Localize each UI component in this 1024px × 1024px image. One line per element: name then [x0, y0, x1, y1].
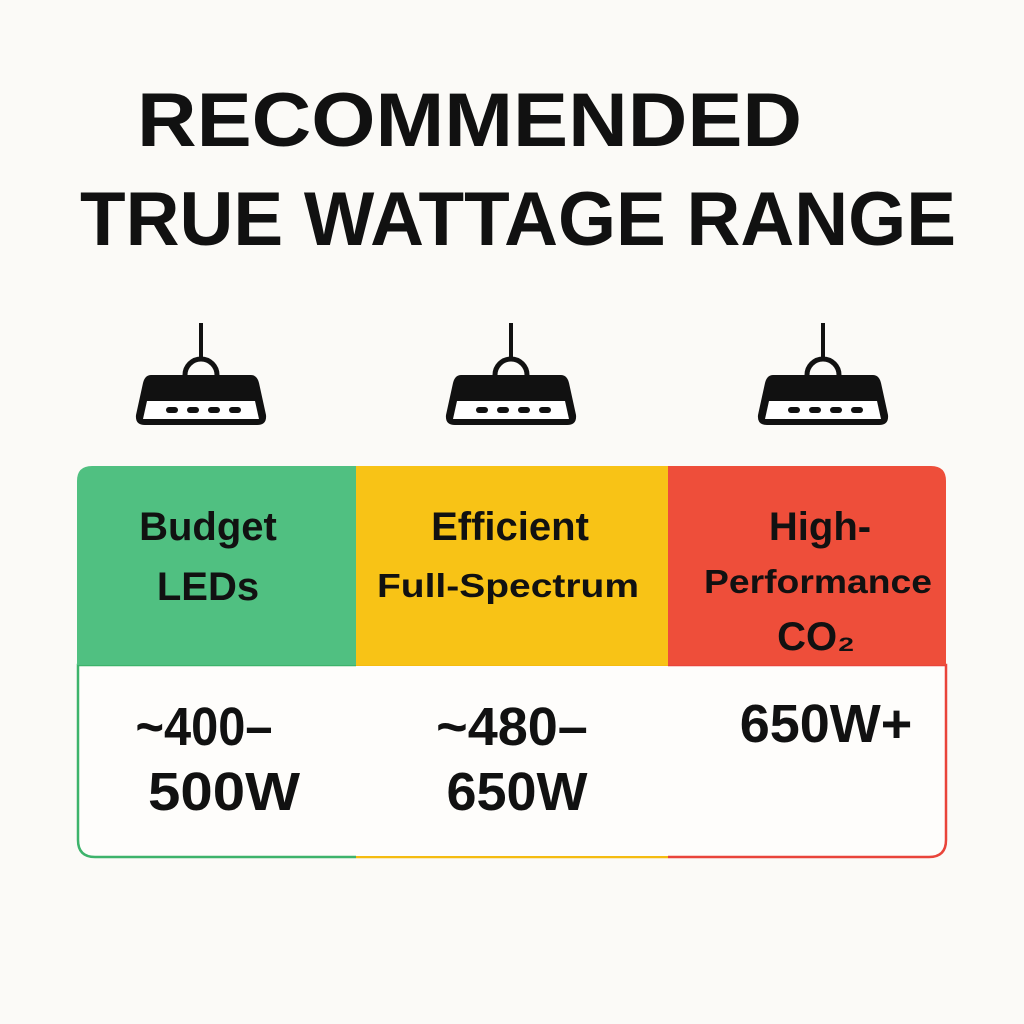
value: budget: 500W	[148, 762, 300, 822]
panel header: budget: Budget	[139, 505, 277, 549]
panel header: efficient: Full-Spectrum	[377, 567, 639, 604]
panel header: high-performance	[668, 466, 946, 665]
value: efficient	[436, 697, 588, 822]
title	[80, 78, 956, 262]
panel header: high-performance: Performance	[704, 563, 932, 600]
panel header: budget	[77, 466, 356, 665]
title: TRUE WATTAGE RANGE	[80, 177, 956, 262]
panel header: budget: LEDs	[157, 565, 259, 609]
title: RECOMMENDED	[137, 78, 802, 163]
value: high-performance: 650W+	[740, 694, 912, 754]
value: efficient: 650W	[446, 762, 588, 822]
table	[77, 466, 946, 857]
value: budget: ~400–	[136, 697, 272, 757]
panel header: high-performance: High-	[769, 505, 871, 549]
icon: lamp 2	[446, 323, 576, 425]
icon: lamp 1	[136, 323, 266, 425]
value: budget	[136, 697, 300, 822]
value: efficient: ~480–	[436, 697, 588, 757]
panel header: high-performance: CO₂	[777, 615, 855, 659]
panel header: efficient: Efficient	[431, 505, 589, 549]
panel header: efficient	[356, 466, 668, 665]
icon: lamp 3	[758, 323, 888, 425]
